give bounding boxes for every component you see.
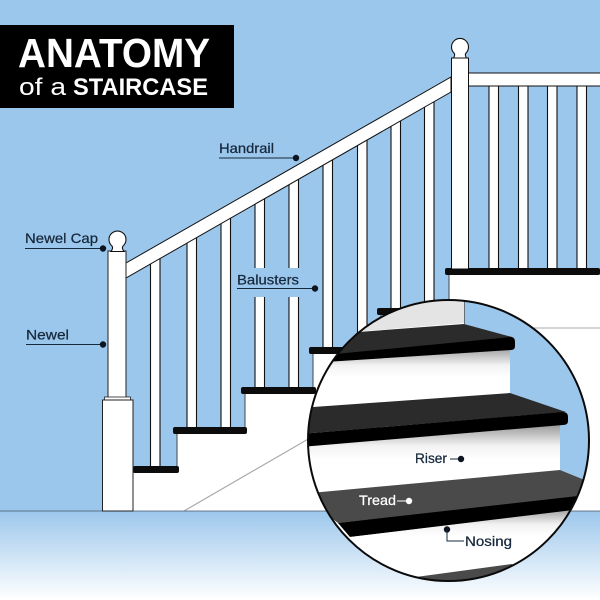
label: newel cap: Newel Cap: [25, 230, 98, 246]
label: newel: Newel: [26, 326, 69, 342]
label: riser: [415, 450, 464, 466]
title block: [0, 25, 234, 108]
lower newel cap: [109, 231, 126, 252]
label: tread: Tread: [359, 492, 396, 508]
nosing three: [338, 496, 578, 537]
lower stair treads: [133, 308, 452, 473]
upper newel post: [452, 58, 468, 269]
lower stair block: [133, 315, 449, 511]
label: balusters: [236, 268, 318, 297]
upper newel cap: [452, 38, 468, 58]
lower newel post: [102, 251, 133, 511]
magnified stair detail: [307, 299, 590, 582]
title line two: STAIRCASE: [73, 74, 208, 101]
tread one: [339, 324, 512, 354]
riser two: [309, 425, 560, 450]
nosing two: [300, 412, 568, 447]
label: balusters: Balusters: [237, 272, 299, 288]
title line two: of a: [19, 74, 67, 101]
upper landing: [449, 275, 600, 511]
label: riser: Riser: [415, 450, 447, 466]
upper handrail: [468, 73, 600, 86]
upper balusters: [489, 85, 586, 269]
tread three: [300, 470, 590, 523]
label: newel: [26, 326, 106, 348]
label: handrail: [219, 140, 299, 161]
title line one: ANATOMY: [18, 30, 210, 76]
magnifier contents: [309, 301, 588, 580]
label: nosing: [444, 526, 512, 549]
lower stair edge: [418, 564, 512, 580]
label: handrail: Handrail: [219, 140, 274, 156]
label: tread: [359, 492, 412, 508]
nosing one: [325, 337, 515, 362]
tread two: [300, 393, 566, 434]
handrail: [126, 77, 451, 278]
riser three: [350, 510, 569, 537]
lower balusters: [150, 96, 434, 467]
floor line: [0, 510, 600, 512]
label: newel cap: [25, 230, 106, 252]
label: nosing: Nosing: [465, 533, 512, 549]
upper landing tread: [445, 268, 600, 275]
floor: [0, 511, 600, 600]
riser one: [329, 350, 510, 370]
magnifier ring: [308, 300, 589, 581]
